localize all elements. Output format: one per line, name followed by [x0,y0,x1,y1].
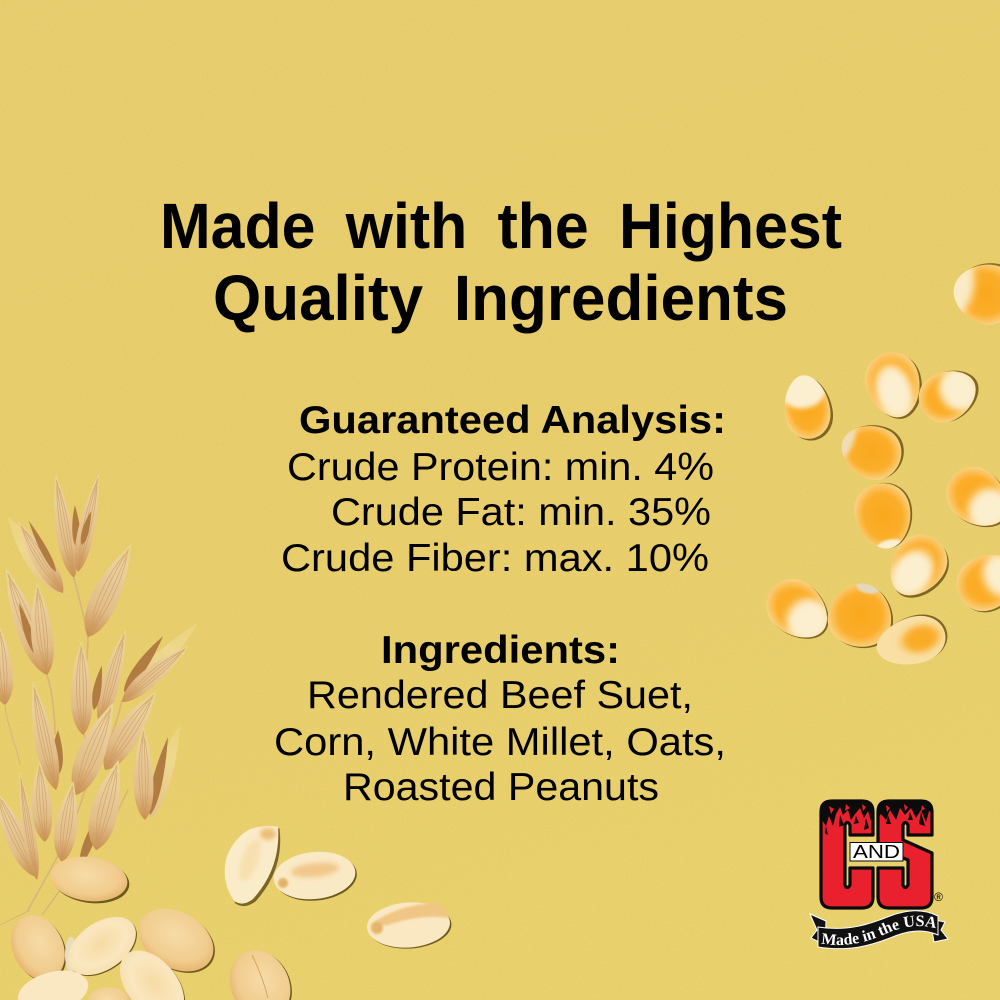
peanut 6 [57,905,148,988]
ingredients list [274,674,726,809]
peanut 7 [127,896,226,986]
peanut 1 [48,852,132,908]
corn kernel 7 [890,534,949,598]
corn kernel 10 [766,579,828,639]
corn kernel 1 [954,263,1000,325]
peanut 10 [87,987,131,1000]
oat spikelet group: bottom [0,756,131,882]
illustration: oat sprig [0,470,204,925]
corn kernel 8 [946,466,1000,528]
text block: guaranteed analysis [281,399,726,580]
ingredients list: Roasted Peanuts [343,766,659,809]
logo letter S [875,798,935,908]
peanut 11 [219,940,303,1000]
oat spikelet group: middle left [0,563,57,706]
peanut 9 [13,963,93,1000]
corn kernel 2 [784,375,834,440]
title: Made with the Highest [160,190,842,262]
crude protein: Crude Protein: min. 4% [287,446,714,489]
logo AND box: AND [853,842,900,862]
corn kernel 11 [828,584,894,648]
peanut 5 [1,906,77,990]
title: Quality Ingredients [213,262,788,334]
ingredients list: Rendered Beef Suet, [307,674,693,717]
peanut 4 [366,900,453,951]
corn kernel 5 [842,425,904,480]
peanut 2 [225,826,280,906]
logo letter C [818,798,876,908]
heading: guaranteed analysis: Guaranteed Analysis: [299,399,726,442]
illustration: peanuts [1,826,453,1000]
logo banner: Made in the USA: Made in the USA [821,916,936,946]
heading: ingredients: Ingredients: [381,629,620,672]
corn kernel 4 [918,370,979,422]
corn kernel 12 [871,608,953,673]
corn kernel 9 [956,555,1000,612]
logo: C and S [818,798,943,908]
peanut 8 [107,938,198,1000]
oat spikelet group: center [22,616,204,800]
illustration: corn kernels [756,254,1000,673]
text block: ingredients [274,629,726,809]
registered mark: ® [934,890,943,904]
peanut 3 [271,848,359,905]
corn kernel 3 [864,352,922,419]
ingredients list: Corn, White Millet, Oats, [274,721,726,764]
corn kernel 6 [854,482,912,548]
title [160,190,842,334]
crude fat: Crude Fat: min. 35% [331,491,711,534]
crude fiber: Crude Fiber: max. 10% [281,537,709,580]
oat spikelet group: top [0,470,143,642]
oat spikelet group: right [133,722,188,821]
